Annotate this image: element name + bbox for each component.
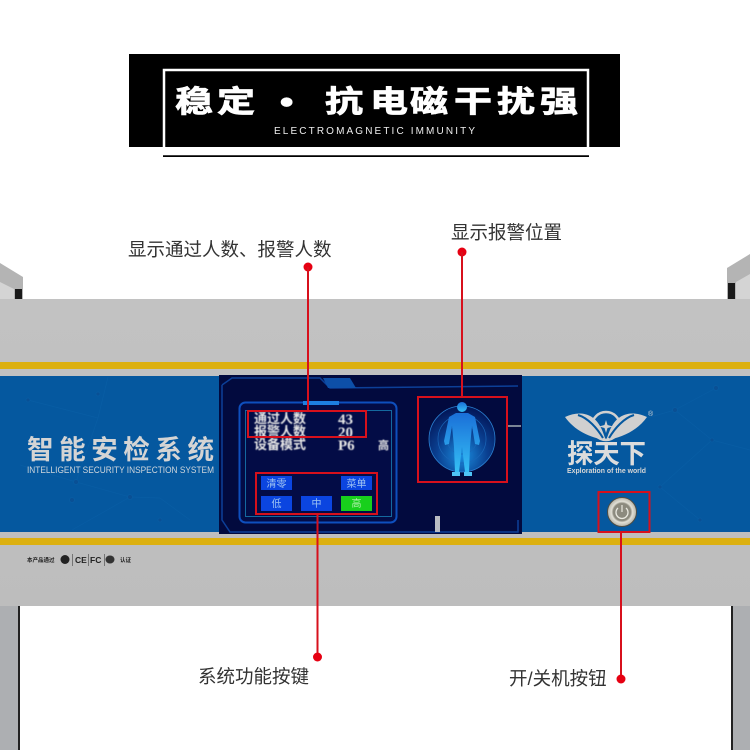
registered mark: ® bbox=[648, 410, 654, 418]
title text: • bbox=[280, 85, 293, 119]
title text: 扰 bbox=[497, 85, 535, 119]
touch screen bbox=[219, 375, 522, 534]
body scan icon bbox=[429, 402, 495, 476]
left leg bbox=[0, 606, 20, 750]
title text: 干 bbox=[454, 85, 492, 119]
right leg bbox=[731, 606, 750, 750]
screen buttons: 高 bbox=[352, 497, 362, 510]
certification row bbox=[27, 554, 132, 566]
callout: function keys bbox=[198, 473, 377, 687]
counter readouts: 通过人数 bbox=[254, 411, 306, 426]
power button bbox=[608, 498, 636, 526]
callout: power key bbox=[509, 492, 650, 689]
counter readouts: 20 bbox=[338, 425, 353, 441]
logo bbox=[565, 410, 654, 475]
counter readouts: 43 bbox=[338, 412, 353, 428]
label: 显示通过人数、报警人数 bbox=[128, 239, 332, 260]
title text: 抗 bbox=[325, 85, 363, 119]
gold strip top bbox=[0, 362, 750, 369]
counter readouts: 报警人数 bbox=[254, 424, 306, 439]
title banner bbox=[129, 54, 620, 157]
network pattern bbox=[20, 377, 750, 530]
certification row: FC bbox=[90, 555, 101, 565]
title text: 稳 bbox=[175, 85, 213, 119]
label: 显示报警位置 bbox=[451, 222, 562, 243]
counter readouts: 高 bbox=[378, 438, 389, 452]
screen buttons bbox=[261, 476, 372, 511]
screen buttons: 菜单 bbox=[346, 478, 366, 490]
counter readouts bbox=[254, 411, 389, 454]
counter readouts: P6 bbox=[338, 438, 355, 454]
label: 系统功能按键 bbox=[198, 666, 309, 687]
title text: 强 bbox=[540, 85, 578, 119]
screen inner frame bbox=[240, 402, 396, 522]
title text: 磁 bbox=[410, 85, 448, 119]
certification row: 认证 bbox=[120, 556, 132, 564]
callout: counters bbox=[128, 239, 366, 437]
blue control panel bbox=[0, 376, 750, 532]
certification row: CE bbox=[75, 555, 87, 565]
label: 开/关机按钮 bbox=[509, 668, 607, 689]
screen buttons: 中 bbox=[312, 497, 322, 510]
callout: alarm position bbox=[418, 222, 562, 482]
counter readouts: 设备模式 bbox=[254, 437, 306, 452]
title text: 定 bbox=[217, 85, 255, 119]
certification row: 本产品通过 bbox=[27, 556, 55, 564]
screen outer frame bbox=[222, 378, 518, 532]
title text bbox=[175, 85, 578, 119]
screen buttons: 清零 bbox=[266, 477, 286, 490]
title text: 电 bbox=[370, 85, 408, 119]
product name: 智能安检系统 bbox=[27, 435, 214, 465]
subtitle text: ELECTROMAGNETIC IMMUNITY bbox=[274, 126, 475, 137]
right upright top bbox=[727, 254, 750, 299]
product name english: INTELLIGENT SECURITY INSPECTION SYSTEM bbox=[27, 465, 214, 475]
brand name: 探天下 bbox=[567, 439, 646, 469]
gold strip bottom bbox=[0, 538, 750, 545]
logo mark bbox=[565, 412, 647, 440]
machine crossbeam bbox=[0, 299, 750, 606]
screen buttons: 低 bbox=[272, 497, 282, 510]
brand slogan: Exploration of the world bbox=[567, 466, 646, 475]
left upright top bbox=[0, 263, 23, 299]
